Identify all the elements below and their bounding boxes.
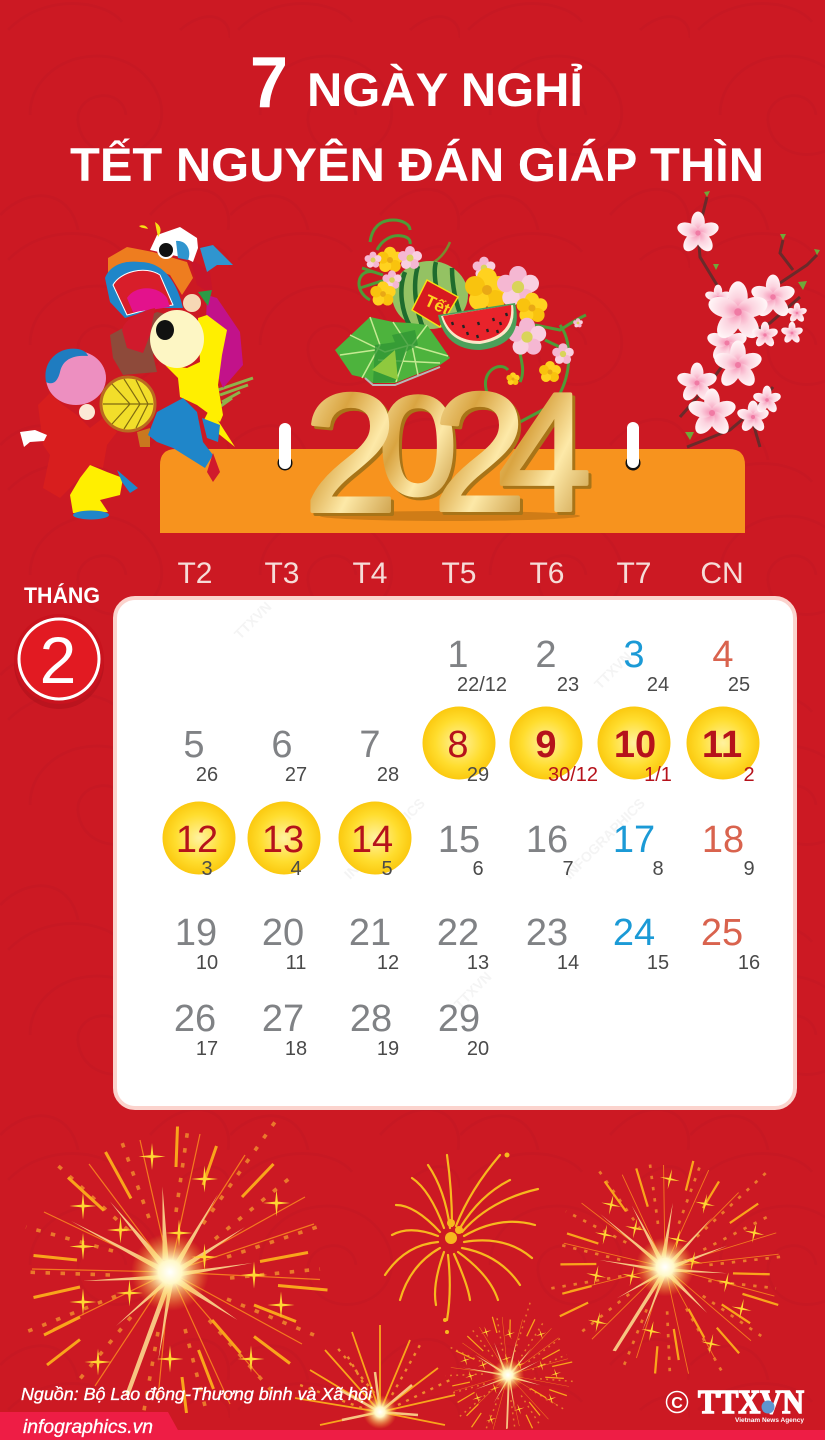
calendar days: 23 bbox=[526, 912, 568, 954]
lunar dates: 4 bbox=[290, 858, 302, 880]
calendar days bbox=[174, 634, 744, 1040]
icon: child with lion mask bbox=[137, 290, 235, 482]
lunar dates: 14 bbox=[557, 952, 579, 974]
lunar dates: 6 bbox=[472, 858, 484, 880]
calendar days: 29 bbox=[438, 998, 480, 1040]
lunar dates: 29 bbox=[467, 764, 489, 786]
calendar days: 2 bbox=[535, 634, 557, 676]
lunar dates: 5 bbox=[381, 858, 393, 880]
watermarks: TTXVN bbox=[231, 598, 275, 642]
calendar days: 10 bbox=[614, 724, 656, 766]
calendar days: 11 bbox=[702, 724, 742, 766]
logo: TTXVN: TTXVN bbox=[698, 1384, 804, 1421]
heading: golden 2024: 2 bbox=[307, 362, 400, 550]
lunar dates: 30/12 bbox=[548, 764, 598, 786]
calendar days: 22 bbox=[437, 912, 479, 954]
panel: calendar card bbox=[115, 598, 795, 1108]
calendar days: 18 bbox=[702, 819, 744, 861]
lunar dates: 19 bbox=[377, 1038, 399, 1060]
calendar days: 5 bbox=[183, 724, 205, 766]
calendar days: 21 bbox=[349, 912, 391, 954]
calendar days: 24 bbox=[613, 912, 655, 954]
lunar dates: 10 bbox=[196, 952, 218, 974]
calendar days: 6 bbox=[271, 724, 293, 766]
heading: golden 2024: 2 bbox=[436, 361, 529, 549]
weekday header: T7 bbox=[616, 557, 652, 590]
calendar days: 16 bbox=[526, 819, 568, 861]
calendar days: 19 bbox=[175, 912, 217, 954]
heading: golden 2024: 2 bbox=[433, 358, 526, 546]
lunar dates: 8 bbox=[652, 858, 664, 880]
lunar dates: 7 bbox=[562, 858, 574, 880]
footer strip bbox=[0, 1412, 825, 1440]
lunar dates: 1/1 bbox=[644, 764, 672, 786]
firework: right bbox=[534, 1133, 805, 1398]
calendar days: 3 bbox=[623, 634, 645, 676]
logo: TTXVN: C bbox=[671, 1395, 683, 1412]
calendar days: 27 bbox=[262, 998, 304, 1040]
lunar dates: 13 bbox=[467, 952, 489, 974]
calendar days: 26 bbox=[174, 998, 216, 1040]
icon: lion body scales bbox=[205, 295, 243, 388]
lunar dates: 2 bbox=[743, 764, 755, 786]
month badge: 2 bbox=[40, 623, 76, 697]
lunar dates: 17 bbox=[196, 1038, 218, 1060]
website label: infographics.vn bbox=[23, 1417, 153, 1438]
title: NGÀY NGHỈ bbox=[307, 63, 583, 116]
lunar dates: 26 bbox=[196, 764, 218, 786]
lunar dates: 22/12 bbox=[457, 674, 507, 696]
watermarks: TTXVN bbox=[591, 648, 635, 692]
icon: watermelon slice bbox=[438, 303, 517, 350]
weekday header bbox=[177, 557, 744, 590]
calendar days: 25 bbox=[701, 912, 743, 954]
logo: TTXVN: Vietnam News Agency bbox=[735, 1417, 804, 1424]
lunar dates: 16 bbox=[738, 952, 760, 974]
title: TẾT NGUYÊN ĐÁN GIÁP THÌN bbox=[70, 138, 764, 191]
icon: brown lion cloth bbox=[110, 312, 170, 375]
lunar dates: 3 bbox=[201, 858, 213, 880]
weekday header: T4 bbox=[352, 557, 388, 590]
firework: gold fountain bbox=[385, 1152, 538, 1334]
calendar days: 15 bbox=[438, 819, 480, 861]
icon: banh chung bbox=[335, 317, 450, 385]
lunar dates: 15 bbox=[647, 952, 669, 974]
icon: vines bbox=[359, 220, 586, 422]
icon: Tet red card bbox=[412, 280, 458, 327]
icon: watermelon bbox=[392, 242, 468, 330]
weekday header: T6 bbox=[529, 557, 565, 590]
lunar dates: 12 bbox=[377, 952, 399, 974]
icon: binder rings bbox=[278, 422, 640, 470]
title bbox=[70, 43, 764, 191]
calendar days: 28 bbox=[350, 998, 392, 1040]
icon: peach blossom branch bbox=[675, 191, 820, 447]
calendar band bbox=[160, 449, 745, 533]
lunar dates: 11 bbox=[286, 952, 306, 974]
heading: golden 2024 bbox=[304, 358, 594, 550]
watermarks: TTXVN bbox=[451, 968, 495, 1012]
watermarks bbox=[231, 598, 648, 1012]
lunar dates: 28 bbox=[377, 764, 399, 786]
calendar days: 17 bbox=[613, 819, 655, 861]
lunar dates: 9 bbox=[743, 858, 755, 880]
fireworks bbox=[23, 1122, 805, 1440]
icon: lion head bbox=[105, 222, 233, 318]
heading: golden 2024: 0 bbox=[379, 367, 457, 524]
weekday header: T3 bbox=[264, 557, 300, 590]
firework: lower centre bbox=[295, 1325, 455, 1429]
icon: Tet red card: Tết bbox=[422, 291, 453, 319]
firework: lower right of centre bbox=[431, 1296, 588, 1440]
weekday header: T2 bbox=[177, 557, 213, 590]
icon: lion dance children bbox=[20, 222, 253, 520]
lunar dates: 23 bbox=[557, 674, 579, 696]
watermarks: INFOGRAPHICS bbox=[561, 795, 648, 882]
lunar dates bbox=[196, 674, 760, 1060]
calendar days: 14 bbox=[351, 819, 393, 861]
month label bbox=[14, 583, 104, 709]
heading: golden 2024: 4 bbox=[501, 361, 594, 549]
logo: TTXVN bbox=[666, 1384, 804, 1424]
calendar days: 13 bbox=[262, 819, 304, 861]
weekday header: T5 bbox=[441, 557, 477, 590]
calendar days: 8 bbox=[447, 724, 469, 766]
calendar days: 9 bbox=[535, 724, 557, 766]
holiday circles bbox=[162, 706, 760, 874]
icon: green tassels bbox=[218, 378, 253, 408]
icon: lion lower jaw bbox=[122, 308, 155, 353]
title: 7 bbox=[250, 43, 288, 123]
calendar days: 1 bbox=[447, 634, 469, 676]
lunar dates: 27 bbox=[285, 764, 307, 786]
calendar days: 7 bbox=[359, 724, 381, 766]
lunar dates: 18 bbox=[285, 1038, 307, 1060]
month label: THÁNG bbox=[24, 583, 100, 608]
calendar days: 4 bbox=[712, 634, 734, 676]
icon: banh chung and watermelon bbox=[335, 220, 586, 422]
lunar dates: 20 bbox=[467, 1038, 489, 1060]
icon: child with fan bbox=[20, 349, 155, 520]
calendar days: 20 bbox=[262, 912, 304, 954]
icon: flowers behind slice bbox=[365, 246, 583, 385]
firework: large left bbox=[23, 1122, 328, 1416]
heading: golden 2024: 2 bbox=[304, 359, 397, 547]
heading: golden 2024: 4 bbox=[498, 358, 591, 546]
weekday header: CN bbox=[700, 557, 744, 590]
source note: Nguồn: Bộ Lao động-Thương binh và Xã hội bbox=[21, 1384, 373, 1404]
calendar days: 12 bbox=[176, 819, 218, 861]
watermarks: INFOGRAPHICS bbox=[341, 795, 428, 882]
lunar dates: 25 bbox=[728, 674, 750, 696]
lunar dates: 24 bbox=[647, 674, 669, 696]
heading: golden 2024: 0 bbox=[382, 370, 460, 527]
